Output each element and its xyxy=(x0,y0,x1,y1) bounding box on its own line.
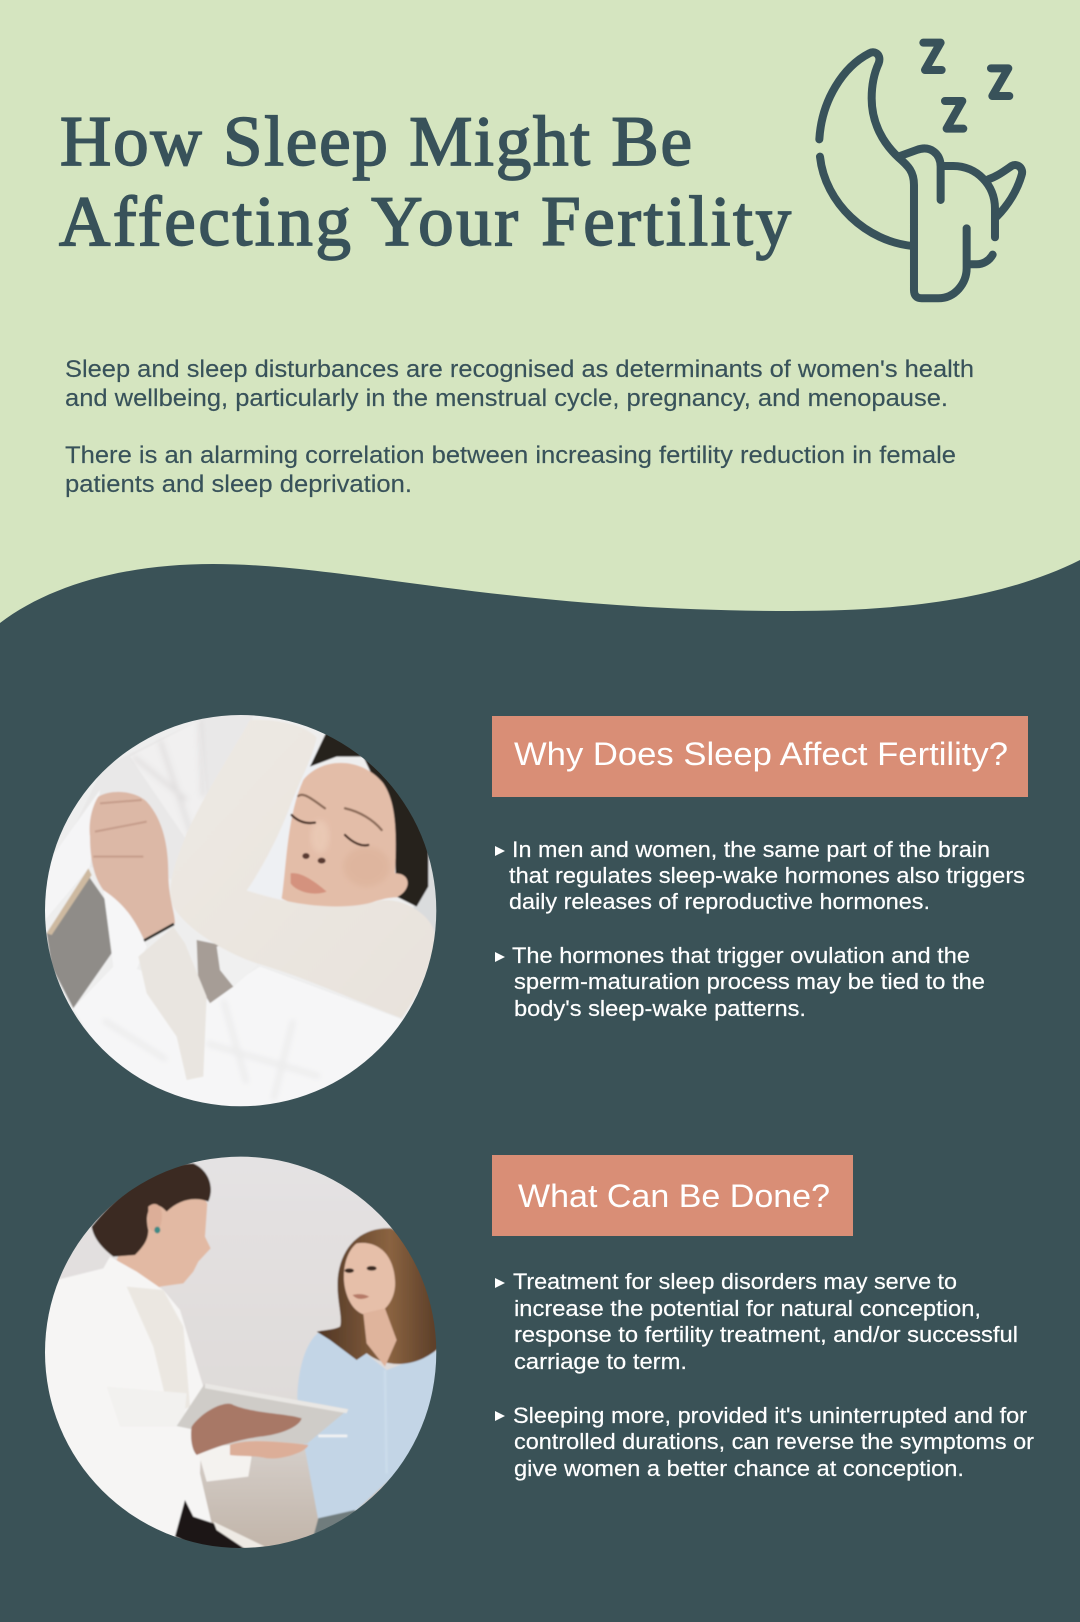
heading: what can be done xyxy=(492,1155,853,1236)
text: what can be done: Treatment for sleep disorders may serve to xyxy=(513,1269,957,1294)
patient face xyxy=(344,1243,395,1315)
intro text xyxy=(65,356,974,498)
coat cuff xyxy=(197,1445,252,1482)
intro text: There is an alarming correlation between increasing fertility reduction in female xyxy=(65,442,956,469)
hair xyxy=(310,732,428,907)
intro text: and wellbeing, particularly in the menstrual cycle, pregnancy, and menopause. xyxy=(65,385,948,412)
wave: dark lower panel xyxy=(0,560,1080,1622)
heading: why does sleep affect fertility: Why Does Sleep Affect Fertility? xyxy=(514,736,1008,772)
heading: why does sleep affect fertility xyxy=(492,716,1028,797)
text: why does sleep affect fertility xyxy=(495,837,1025,1021)
intro text: Sleep and sleep disturbances are recognised as determinants of women's health xyxy=(65,356,974,383)
doctor hands xyxy=(191,1404,302,1455)
duvet xyxy=(73,963,403,1113)
doctor coat xyxy=(37,1257,212,1540)
dark trousers xyxy=(174,1500,262,1548)
text: what can be done: carriage to term. xyxy=(514,1349,687,1374)
text: why does sleep affect fertility: body's sleep-wake patterns. xyxy=(514,996,806,1021)
intro text: patients and sleep deprivation. xyxy=(65,471,412,498)
patient hair xyxy=(317,1228,438,1364)
text: what can be done: give women a better chance at conception. xyxy=(514,1456,964,1481)
shadow between arms xyxy=(196,940,234,1004)
text: why does sleep affect fertility: In men and women, the same part of the brain xyxy=(512,837,990,862)
pillow xyxy=(247,737,320,900)
photo: woman sleeping xyxy=(40,710,443,1113)
text: why does sleep affect fertility: The hormones that trigger ovulation and the xyxy=(512,943,970,968)
wrist sleeve xyxy=(138,927,207,1080)
tablet xyxy=(177,1383,348,1444)
doctor hair xyxy=(92,1163,211,1257)
title: Affecting Your Fertility xyxy=(59,183,792,261)
icon: sleeping moon with zzz xyxy=(819,43,1022,298)
pale background at right xyxy=(414,854,436,934)
sheets behind xyxy=(45,713,253,887)
text: what can be done: controlled durations, can reverse the symptoms or xyxy=(514,1429,1035,1454)
large arm sleeve xyxy=(170,720,435,1018)
text: what can be done: response to fertility treatment, and/or successful xyxy=(514,1322,1018,1347)
header background xyxy=(0,0,1080,640)
patient shirt xyxy=(297,1332,440,1520)
hand xyxy=(90,792,175,942)
title: How Sleep Might Be xyxy=(60,103,692,181)
eyes, brows, nose, lips xyxy=(292,795,382,845)
doctor neck and face xyxy=(116,1198,211,1288)
photo: doctor and patient xyxy=(37,1153,443,1557)
title xyxy=(59,103,792,261)
text: what can be done xyxy=(495,1269,1035,1481)
heading: what can be done: What Can Be Done? xyxy=(518,1178,830,1214)
text: what can be done: Sleeping more, provided it's uninterrupted and for xyxy=(513,1403,1028,1428)
face xyxy=(282,763,408,907)
text: why does sleep affect fertility: daily releases of reproductive hormones. xyxy=(509,889,930,914)
text: why does sleep affect fertility: that regulates sleep-wake hormones also triggers xyxy=(509,863,1025,888)
text: what can be done: increase the potential for natural conception, xyxy=(514,1296,981,1321)
gray sleeve and wooden edge xyxy=(47,873,112,1008)
text: why does sleep affect fertility: sperm-maturation process may be tied to the xyxy=(514,969,985,994)
